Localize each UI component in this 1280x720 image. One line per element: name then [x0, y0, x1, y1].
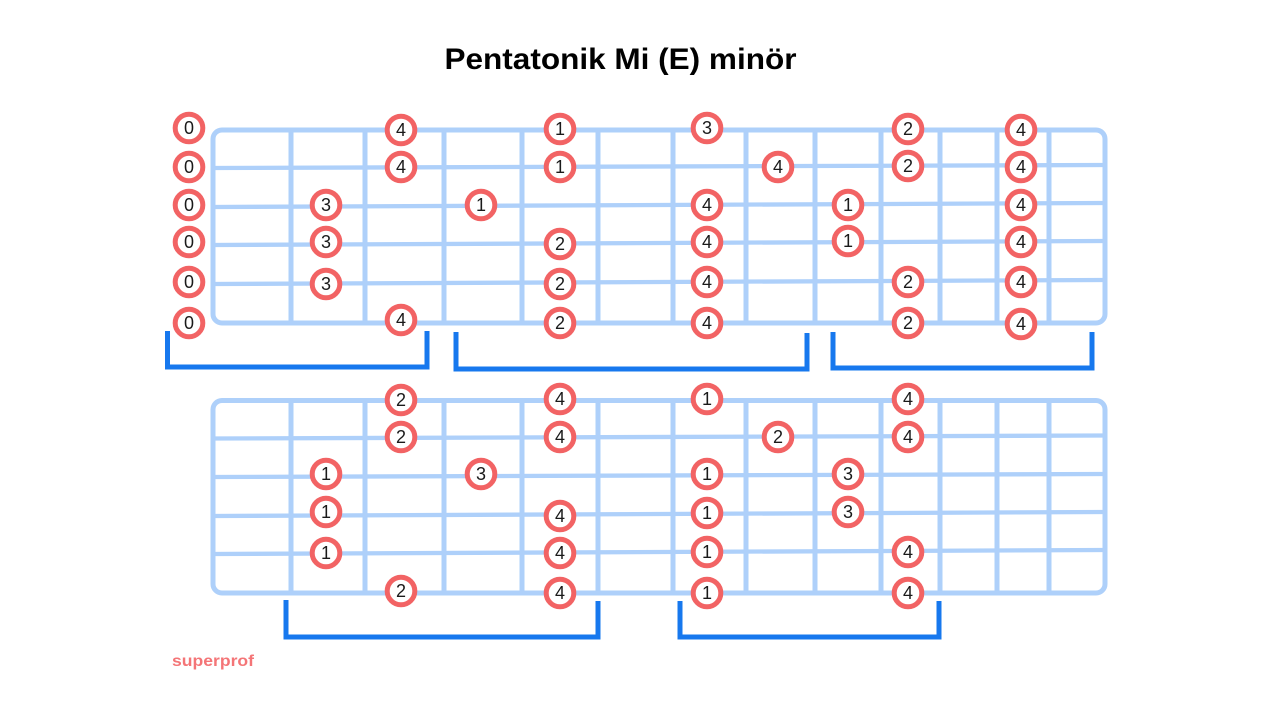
bracket: top position 3: [833, 332, 1092, 368]
notes: top open strings: 0: [184, 195, 194, 215]
notes: top open strings: 0: [184, 232, 194, 252]
notes: bottom column 326: [312, 460, 340, 567]
bracket: top position 2: [456, 332, 807, 369]
notes: top column 1021: 4: [1016, 314, 1026, 334]
notes: top column 326: [312, 191, 340, 298]
notes: top column 1021: 4: [1016, 120, 1026, 140]
notes: top column 908: 2: [903, 313, 913, 333]
notes: top column 326: 3: [321, 232, 331, 252]
notes: top column 481: [467, 191, 495, 219]
notes: bottom column 908: 4: [903, 542, 913, 562]
notes: bottom column 707: 1: [702, 583, 712, 603]
notes: top column 778: [764, 153, 792, 181]
notes: top column 707: 4: [702, 313, 712, 333]
bracket: bottom position 1: [286, 600, 598, 637]
notes: top open strings: 0: [184, 272, 194, 292]
notes: top column 908: 2: [903, 156, 913, 176]
notes: bottom column 908: 4: [903, 389, 913, 409]
notes: top column 707: 4: [702, 232, 712, 252]
panel: top fretboard: [213, 130, 1105, 323]
notes: top column 560: 1: [555, 157, 565, 177]
notes: top column 560: 2: [555, 313, 565, 333]
notes: top column 401: 4: [396, 120, 406, 140]
notes: top open strings: 0: [184, 157, 194, 177]
notes: top column 326: 3: [321, 195, 331, 215]
notes: bottom column 326: 1: [321, 543, 331, 563]
notes: top column 1021: 4: [1016, 157, 1026, 177]
notes: bottom column 401: 2: [396, 427, 406, 447]
notes: top column 326: 3: [321, 274, 331, 294]
notes: top column 401: 4: [396, 157, 406, 177]
notes: bottom column 481: [467, 460, 495, 488]
notes: bottom column 707: 1: [702, 542, 712, 562]
notes: top column 1021: 4: [1016, 272, 1026, 292]
notes: bottom column 707: 1: [702, 503, 712, 523]
notes: bottom column 560: 4: [555, 389, 565, 409]
notes: bottom column 326: 1: [321, 464, 331, 484]
notes: bottom column 908: 4: [903, 427, 913, 447]
notes: top column 908: 2: [903, 272, 913, 292]
notes: bottom column 560: 4: [555, 506, 565, 526]
notes: bottom column 560: [546, 385, 574, 607]
title: Pentatonik Mi (E) minör: [444, 43, 797, 76]
notes: top column 848: 1: [843, 231, 853, 251]
notes: bottom column 848: 3: [843, 464, 853, 484]
notes: bottom column 707: 1: [702, 389, 712, 409]
notes: top column 707: 3: [702, 118, 712, 138]
notes: bottom column 908: 4: [903, 583, 913, 603]
notes: top column 848: [834, 191, 862, 255]
notes: bottom column 401: [387, 386, 415, 605]
notes: top column 707: 4: [702, 195, 712, 215]
notes: top column 401: [387, 116, 415, 334]
notes: bottom column 778: [764, 423, 792, 451]
bracket: bottom position 2: [680, 601, 939, 637]
notes: top open strings: [175, 114, 203, 337]
notes: top column 560: 2: [555, 234, 565, 254]
notes: bottom column 707: 1: [702, 464, 712, 484]
notes: bottom column 560: 4: [555, 427, 565, 447]
notes: top column 1021: 4: [1016, 232, 1026, 252]
notes: top column 778: 4: [773, 157, 783, 177]
notes: bottom column 560: 4: [555, 543, 565, 563]
notes: top column 908: 2: [903, 119, 913, 139]
panel: bottom fretboard: [213, 400, 1105, 593]
notes: top column 481: 1: [476, 195, 486, 215]
notes: bottom column 326: 1: [321, 502, 331, 522]
notes: top column 1021: 4: [1016, 195, 1026, 215]
notes: top column 401: 4: [396, 310, 406, 330]
notes: top column 1021: [1007, 116, 1035, 338]
notes: bottom column 848: [834, 460, 862, 526]
notes: top column 560: 1: [555, 119, 565, 139]
notes: top column 908: [894, 115, 922, 337]
bracket: top position 1: [168, 331, 427, 367]
notes: bottom column 481: 3: [476, 464, 486, 484]
notes: bottom column 560: 4: [555, 583, 565, 603]
notes: bottom column 401: 2: [396, 390, 406, 410]
notes: top open strings: 0: [184, 118, 194, 138]
notes: bottom column 908: [894, 385, 922, 607]
notes: bottom column 778: 2: [773, 427, 783, 447]
notes: bottom column 401: 2: [396, 581, 406, 601]
notes: top column 707: 4: [702, 272, 712, 292]
notes: top open strings: 0: [184, 313, 194, 333]
logo: superprof: superprof: [172, 653, 255, 670]
notes: top column 707: [693, 114, 721, 337]
notes: top column 560: [546, 115, 574, 337]
notes: bottom column 707: [693, 385, 721, 607]
notes: top column 560: 2: [555, 274, 565, 294]
notes: top column 848: 1: [843, 195, 853, 215]
notes: bottom column 848: 3: [843, 502, 853, 522]
